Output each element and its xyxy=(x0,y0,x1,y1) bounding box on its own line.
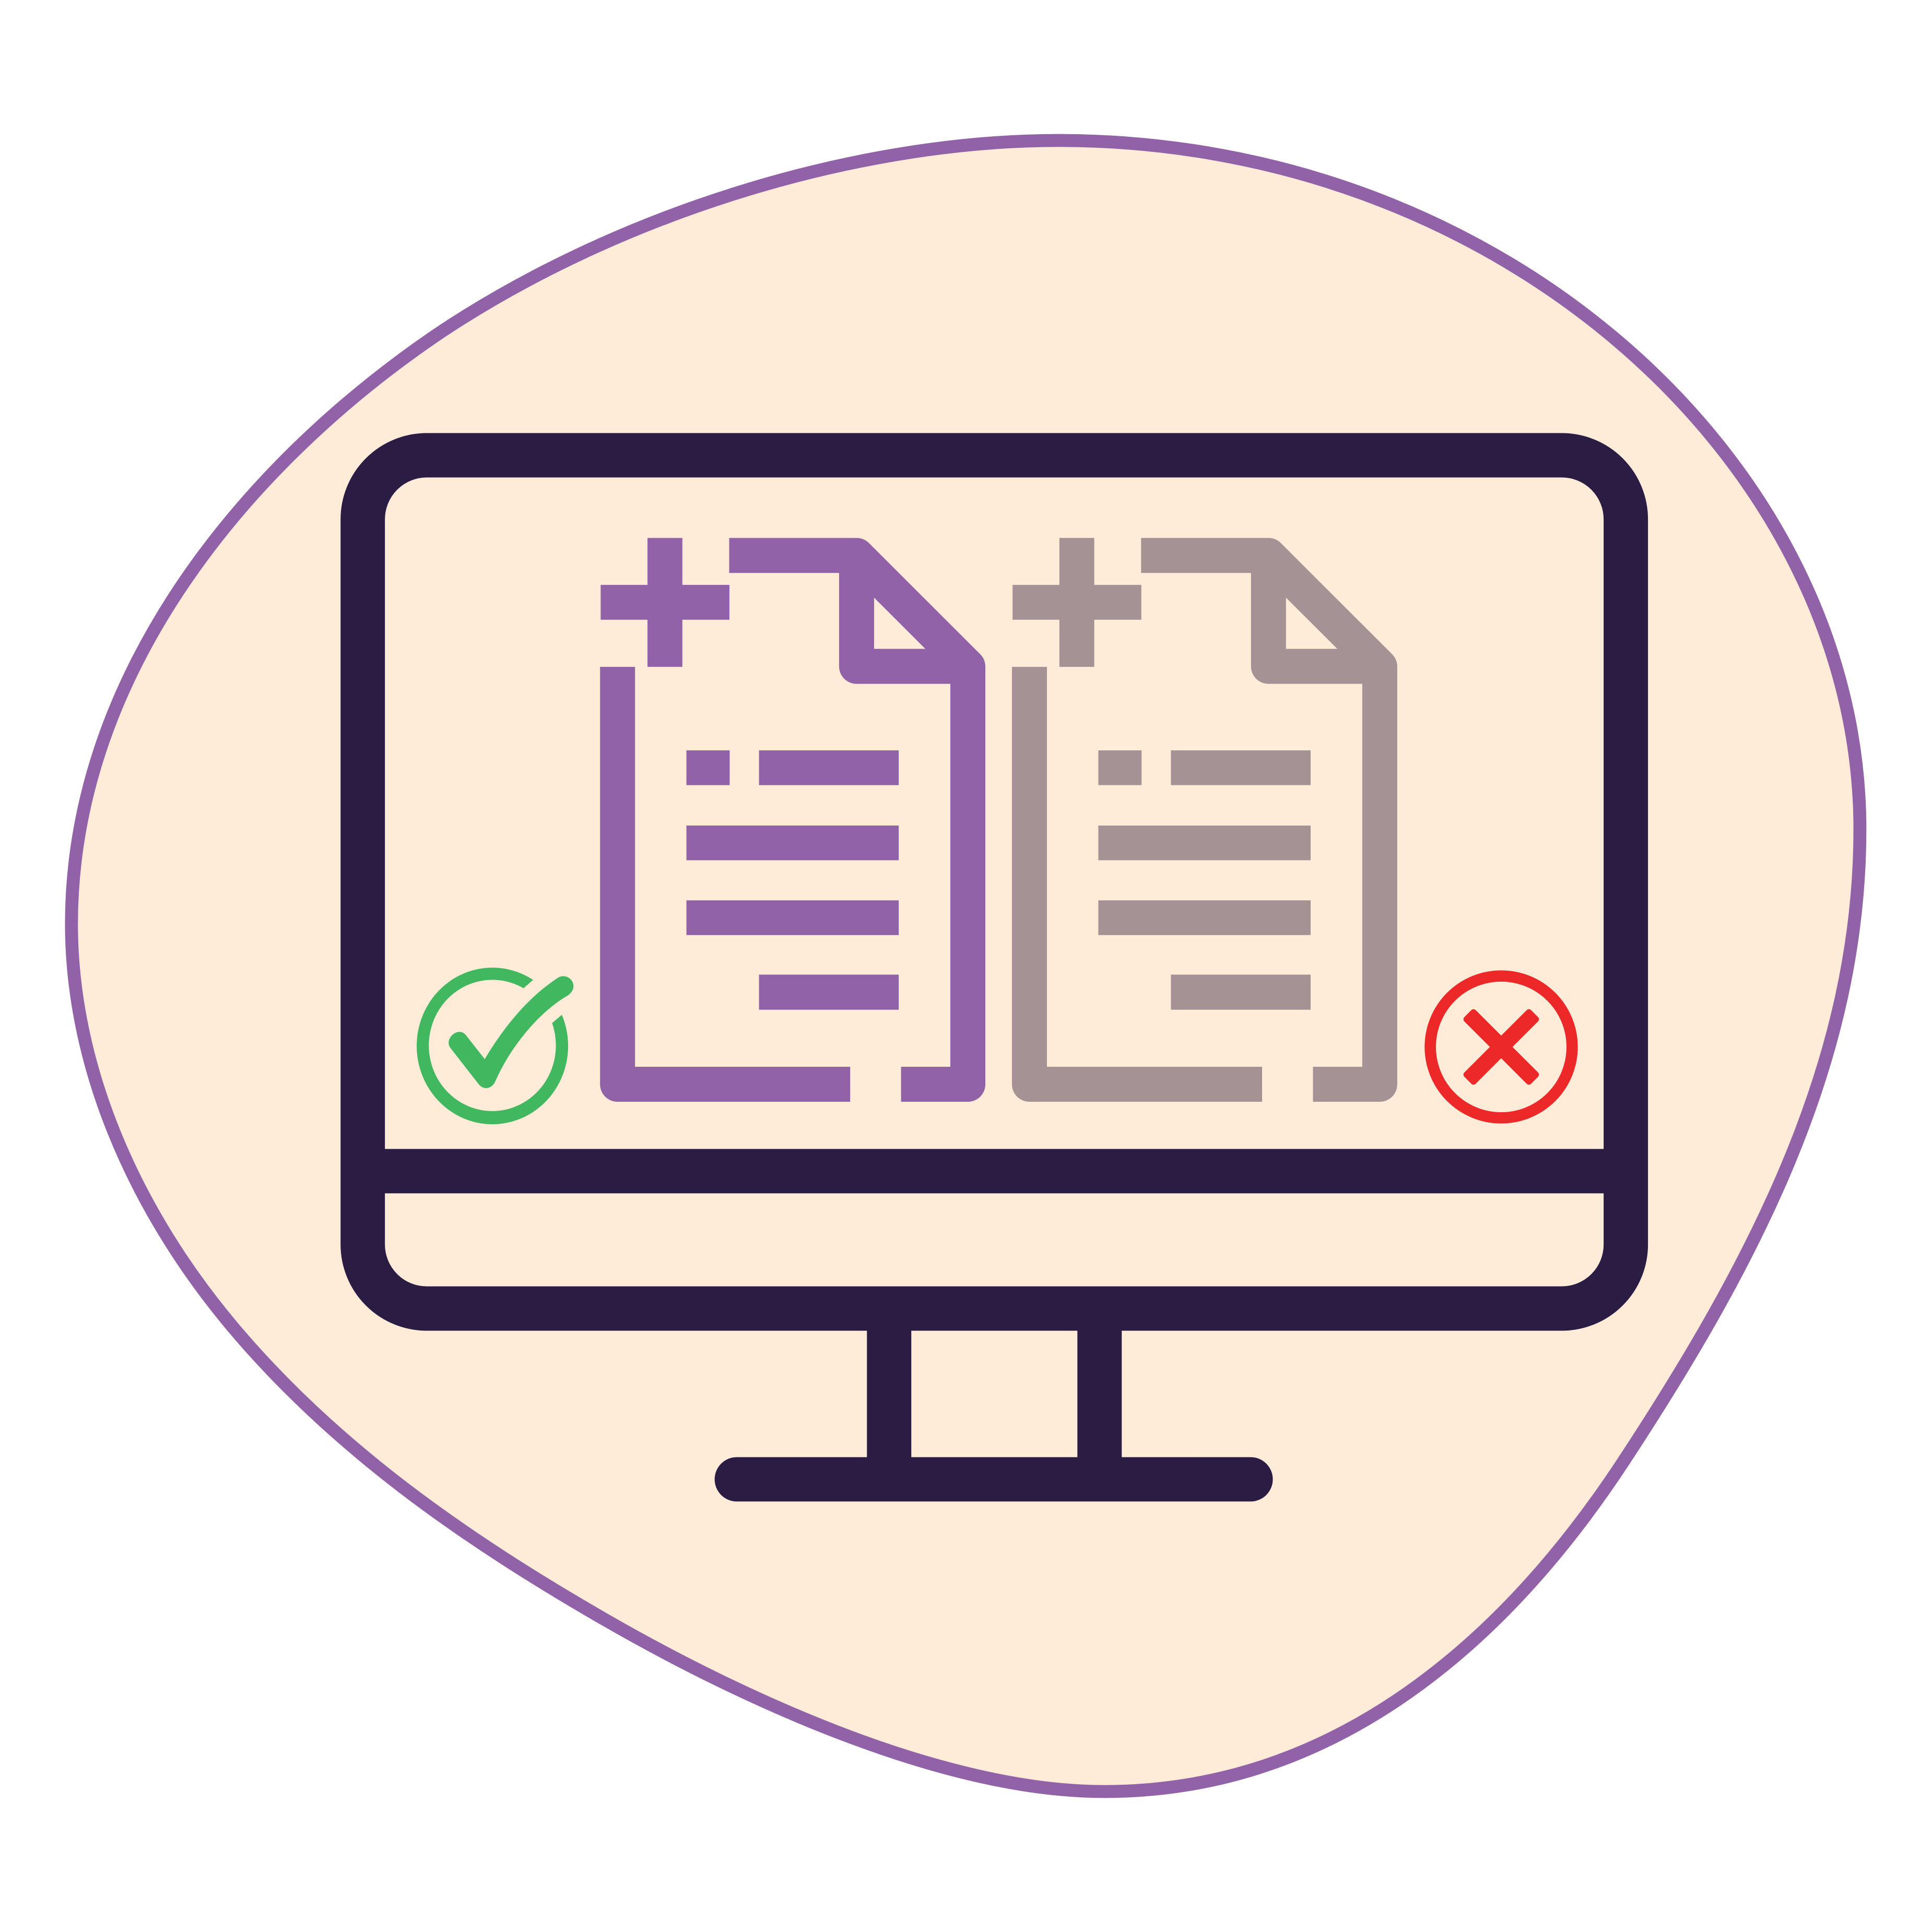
cross ring xyxy=(1430,976,1572,1118)
plus icon xyxy=(600,538,729,667)
text lines xyxy=(687,750,899,1010)
monitor screen divider xyxy=(363,1162,1626,1181)
check ring xyxy=(417,968,568,1124)
text lines xyxy=(1098,750,1311,1010)
icon: green check xyxy=(417,968,573,1124)
monitor base xyxy=(737,1470,1251,1489)
document with plus: purple xyxy=(600,538,968,1085)
document outline xyxy=(1030,556,1380,1085)
icon: red cross xyxy=(1430,976,1572,1118)
background blob xyxy=(72,140,1860,1792)
plus icon xyxy=(1012,538,1141,667)
monitor stand xyxy=(889,1309,1100,1479)
document outline xyxy=(618,556,968,1085)
document with plus: grey xyxy=(1012,538,1380,1085)
monitor frame xyxy=(363,455,1626,1309)
check mark xyxy=(449,976,573,1088)
cross mark xyxy=(1434,980,1568,1114)
monitor xyxy=(363,455,1626,1479)
